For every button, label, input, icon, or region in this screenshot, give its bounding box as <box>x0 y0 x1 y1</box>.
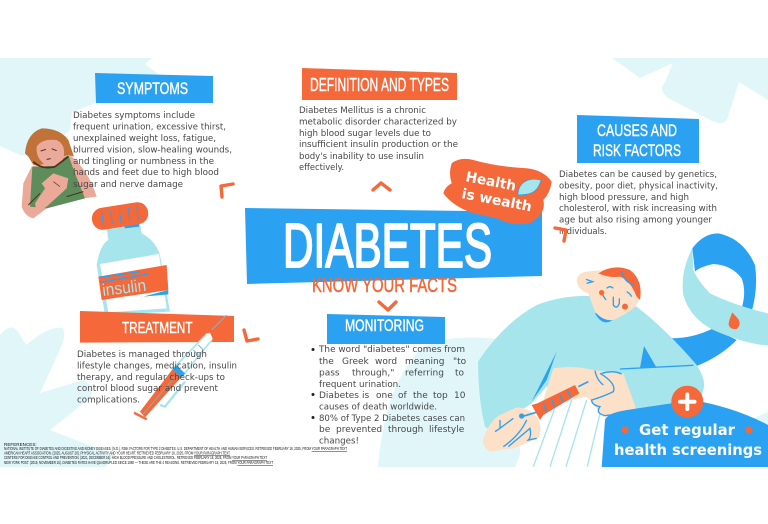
panel: monitoring: The word "diabetes" comes from <box>318 345 465 355</box>
bottle label: insulin: insulin <box>101 276 147 300</box>
panel: treatment: complications. <box>77 396 140 406</box>
panel: definition and types: body's inability to use insulin <box>299 152 424 162</box>
panel: monitoring: of <box>398 391 408 401</box>
panel: monitoring <box>312 314 467 446</box>
references: CENTERS FOR DISEASE CONTROL AND PREVENTION. (2021, DECEMBER 16). HIGH BLOOD PRESSURE AND CHOLESTEROL. RETRIEVED FEBRUARY 18, 2025, FROM YOUR PARAGRAPH TEXT <box>4 455 267 460</box>
main title banner: KNOW YOUR FACTS <box>312 274 457 297</box>
panel: monitoring: pass <box>319 368 340 378</box>
panel: monitoring: lifestyle <box>429 425 465 435</box>
panel: monitoring: referring <box>405 368 444 378</box>
panel: monitoring: Diabetes <box>319 391 359 401</box>
illustration: syringe <box>134 315 227 419</box>
panel: treatment <box>77 311 237 419</box>
panel: monitoring: to <box>455 368 465 378</box>
panel: monitoring: 10 <box>454 391 466 401</box>
illustration: insulin bottle <box>90 201 170 315</box>
illustration: man injecting insulin <box>478 267 704 467</box>
badge: health is wealth <box>443 159 552 224</box>
references: REFERENCES: <box>4 442 37 447</box>
panel: treatment: Diabetes is managed through <box>77 350 207 360</box>
orange chevrons and corner accents <box>221 183 566 341</box>
references <box>4 442 347 465</box>
callout: get regular health screenings <box>602 386 768 467</box>
panel: symptoms <box>73 73 232 190</box>
panel: monitoring: top <box>433 391 448 401</box>
panel: symptoms: hands and feet due to high blood <box>73 168 219 178</box>
callout: get regular health screenings: health screenings <box>614 441 762 459</box>
main title banner <box>245 208 542 297</box>
panel: monitoring: 80% of Type 2 Diabetes cases can <box>319 414 465 424</box>
panel: causes and risk factors: obesity, poor diet, physical inactivity, <box>559 182 718 192</box>
panel: treatment: control blood sugar and prevent <box>77 384 218 394</box>
panel: causes and risk factors: high blood pressure, and high <box>559 193 689 203</box>
panel: causes and risk factors: age but also rising among younger <box>559 216 712 226</box>
panel: monitoring: MONITORING <box>345 316 424 335</box>
panel: symptoms: SYMPTOMS <box>117 80 188 98</box>
illustration: woman with chest pain <box>22 128 97 218</box>
illustration: awareness ribbon <box>672 233 768 366</box>
main title banner: DIABETES <box>283 212 492 281</box>
panel: definition and types: insufficient insulin production or the <box>299 140 458 150</box>
panel: monitoring: through <box>388 425 423 435</box>
references: NEW YORK POST. (2019, NOVEMBER 15). DIABETES RATES HAVE QUADRUPLED SINCE 1980 — THESE ARE THE 4 REASONS. RETRIEVED FEBRUARY 18, 2025, FROM YOUR PARAGRAPH TEXT <box>4 460 273 465</box>
callout: get regular health screenings: Get regular <box>639 421 736 439</box>
icon: leaf <box>518 179 541 195</box>
references: NATIONAL INSTITUTE OF DIABETES AND DIGESTIVE AND KIDNEY DISEASES. (N.D.). RISK FACTORS FOR TYPE 2 DIABETES. U.S. DEPARTMENT OF HEALTH AND HUMAN SERVICES. RETRIEVED FEBRUARY 18, 2025, FROM YOUR PARAGRAPH TEXT <box>4 446 347 451</box>
panel: causes and risk factors: Diabetes can be caused by genetics, <box>559 170 717 180</box>
badge: health is wealth: Health <box>464 169 517 195</box>
panel: treatment: therapy, and regular check-ups to <box>77 373 225 383</box>
panel: monitoring: frequent urination. <box>319 380 401 390</box>
panel: monitoring: causes of death worldwide. <box>319 402 437 412</box>
panel: monitoring: the <box>413 391 428 401</box>
panel: causes and risk factors: individuals. <box>559 227 607 237</box>
panel: monitoring: changes! <box>319 436 359 446</box>
panel: monitoring: meaning <box>405 357 444 367</box>
panel: causes and risk factors: cholesterol, with risk increasing with <box>559 204 717 214</box>
panel: monitoring: is <box>362 391 370 401</box>
references: AMERICAN HEART ASSOCIATION. (2025, AUGUST 26). PHYSICAL ACTIVITY AND YOUR HEART. RETRIEVED FEBRUARY 18, 2025, FROM YOUR PARAGRAPH TEXT <box>4 450 230 456</box>
panel: monitoring: "to <box>453 357 467 367</box>
panel: monitoring: word <box>375 357 397 367</box>
panel: monitoring: Greek <box>342 357 370 367</box>
panel: causes and risk factors <box>559 115 718 237</box>
panel: monitoring: the <box>319 357 334 367</box>
panel: definition and types: effectively. <box>299 163 344 173</box>
panel: symptoms: Diabetes symptoms include <box>73 111 195 121</box>
panel: definition and types: metabolic disorder characterized by <box>299 118 458 128</box>
panel: monitoring: one <box>376 391 393 401</box>
icon: blood drop <box>729 312 740 329</box>
panel: causes and risk factors: CAUSES AND <box>597 121 677 140</box>
panel: definition and types <box>299 68 458 173</box>
panel: definition and types: Diabetes Mellitus is a chronic <box>299 106 426 116</box>
panel: treatment: TREATMENT <box>122 320 193 337</box>
panel: causes and risk factors: RISK FACTORS <box>593 141 681 160</box>
panel: monitoring: be <box>319 425 331 435</box>
panel: definition and types: high blood sugar levels due to <box>299 129 431 139</box>
background shapes <box>0 58 768 467</box>
panel: symptoms: blurred vision, slow-healing wounds, <box>73 146 232 156</box>
panel: symptoms: unexplained weight loss, fatigue, <box>73 134 216 144</box>
panel: monitoring: through," <box>352 368 394 378</box>
panel: monitoring: prevented <box>336 425 382 435</box>
panel: treatment: lifestyle changes, medication, insulin <box>77 362 237 372</box>
panel: definition and types: DEFINITION AND TYPES <box>310 75 449 95</box>
panel: symptoms: and tingling or numbness in the <box>73 157 214 167</box>
panel: symptoms: frequent urination, excessive thirst, <box>73 122 226 132</box>
icon: orange syringe <box>519 382 588 420</box>
panel: symptoms: sugar and nerve damage <box>73 180 183 190</box>
badge: health is wealth: is wealth <box>460 186 533 215</box>
